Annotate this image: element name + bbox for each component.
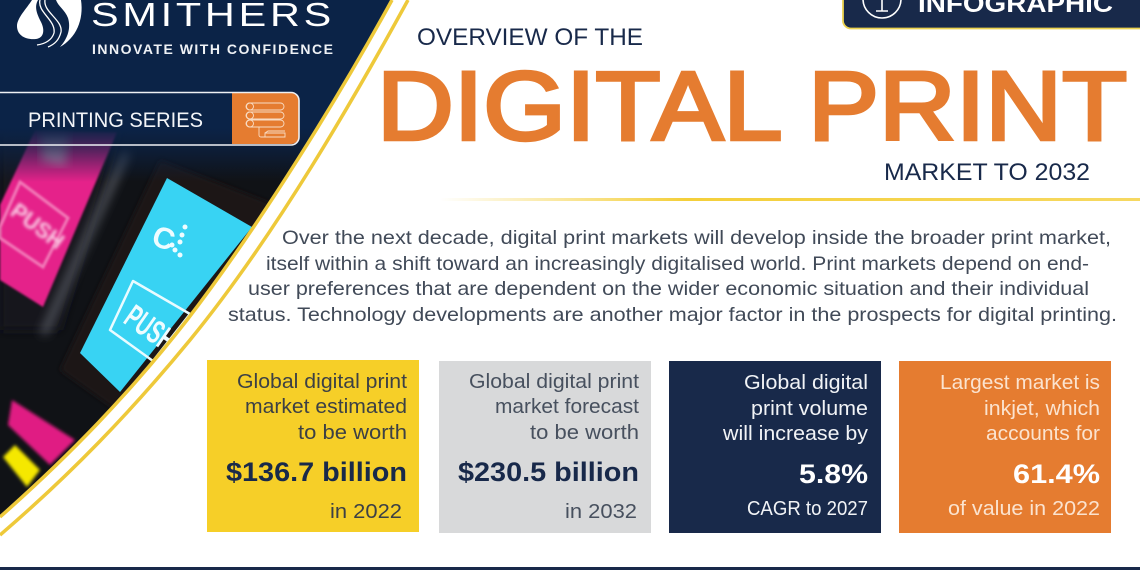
- stat card: $136.7 billion: [207, 360, 419, 532]
- intro paragraph: status. Technology developments are another major factor in the prospects for digital printing.: [228, 304, 1117, 326]
- stat card: 61.4%: of value in 2022: [948, 497, 1100, 520]
- stat card: $230.5 billion: in 2032: [565, 500, 637, 523]
- heading: overview of the: OVERVIEW OF THE: [417, 24, 643, 51]
- intro paragraph: user preferences that are dependent on the wider economic situation and their individual: [248, 278, 1089, 300]
- stat card: 5.8%: CAGR to 2027: [747, 497, 868, 520]
- stat card: $136.7 billion: market estimated: [245, 395, 407, 418]
- value: 5.8%: [799, 459, 868, 489]
- stat card: $230.5 billion: [439, 361, 651, 533]
- icon: logo drop: [17, 0, 82, 47]
- heading: market to 2032: MARKET TO 2032: [884, 159, 1090, 186]
- stat card: 5.8%: Global digital: [744, 371, 868, 394]
- badge: infographic: [843, 0, 1140, 29]
- stat card: $136.7 billion: to be worth: [298, 421, 407, 444]
- photo: ink cartridges: [0, 0, 400, 520]
- photo: ink cartridges: PUSH: [118, 297, 183, 359]
- stat card: 61.4%: Largest market is: [940, 371, 1100, 394]
- footer bar: [0, 567, 1140, 570]
- stat card: $136.7 billion: Global digital print: [237, 370, 407, 393]
- icon: info circle: [863, 0, 901, 18]
- value: $136.7 billion: [226, 457, 407, 487]
- icon: printing rollers: [246, 103, 285, 137]
- stat card: $136.7 billion: in 2022: [330, 500, 402, 523]
- photo: ink cartridges: PUSH: [6, 198, 69, 254]
- photo: ink cartridges: C: [148, 220, 179, 258]
- logo: Smithers: [17, 0, 335, 57]
- stat card: 5.8%: [669, 361, 881, 533]
- intro paragraph: Over the next decade, digital print markets will develop inside the broader print market,: [282, 227, 1111, 249]
- title: digital print: DIGITAL PRINT: [377, 52, 1127, 160]
- stat card: 5.8%: print volume: [751, 397, 868, 420]
- value: $230.5 billion: [458, 457, 639, 487]
- stat card: 61.4%: [899, 361, 1111, 533]
- stat card: $230.5 billion: market forecast: [495, 395, 639, 418]
- logo tagline: INNOVATE WITH CONFIDENCE: [92, 41, 333, 57]
- stat card: 61.4%: inkjet, which: [984, 397, 1100, 420]
- series tab: printing series: [0, 92, 299, 145]
- stat card: $230.5 billion: Global digital print: [469, 370, 639, 393]
- stat card: 61.4%: accounts for: [986, 422, 1100, 445]
- intro paragraph: [228, 227, 1117, 326]
- curved yellow double line: [0, 0, 408, 535]
- series label: PRINTING SERIES: [28, 109, 203, 132]
- value: 61.4%: [1013, 459, 1100, 489]
- intro paragraph: itself within a shift toward an increasingly digitalised world. Print markets depend on end-: [266, 253, 1089, 275]
- stat card: $230.5 billion: to be worth: [530, 421, 639, 444]
- stat card: 5.8%: will increase by: [722, 422, 869, 445]
